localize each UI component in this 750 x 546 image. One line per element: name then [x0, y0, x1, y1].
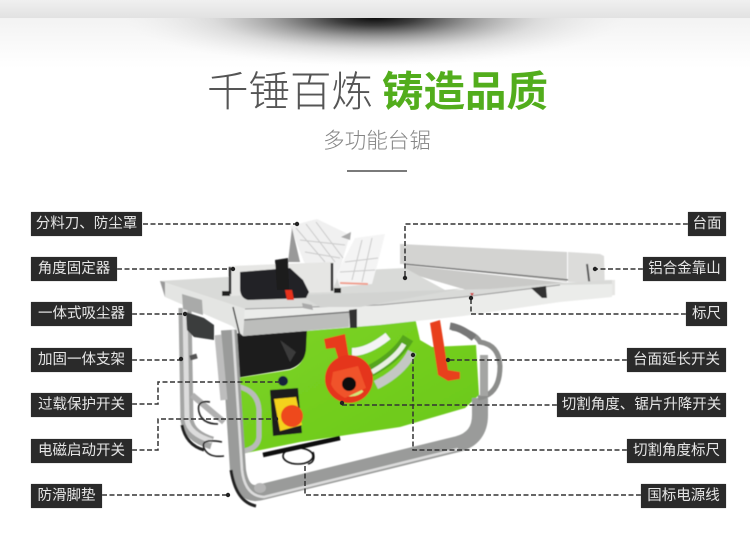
leader lines	[102, 224, 688, 495]
title: green part: 铸造品质	[382, 68, 548, 115]
table saw	[160, 219, 615, 506]
label: magnetic switch: 电磁启动开关	[38, 443, 125, 459]
power cable bundle	[263, 438, 340, 464]
label: cut angle and blade lift	[557, 393, 726, 417]
right handle	[452, 328, 500, 398]
label: table top	[688, 212, 726, 236]
emergency switch	[270, 388, 303, 436]
label: ruler	[686, 302, 727, 326]
red lever	[430, 320, 460, 381]
label: aluminium fence	[643, 257, 726, 281]
green body	[238, 318, 479, 454]
header band with shadow	[0, 0, 750, 60]
label: dust port	[31, 302, 132, 326]
red crank	[324, 334, 349, 358]
label: angle lock	[31, 257, 117, 281]
small overload button	[278, 376, 288, 386]
dust port	[186, 312, 214, 340]
base frame	[218, 330, 480, 506]
label: power cord: 国标电源线	[647, 488, 720, 504]
label: power cord	[641, 484, 726, 508]
label: table top: 台面	[692, 216, 722, 232]
label: magnetic switch	[31, 439, 132, 463]
label: dust port: 一体式吸尘器	[38, 306, 125, 322]
label: angle scale	[627, 439, 726, 463]
label: anti-slip feet: 防滑脚垫	[38, 488, 96, 504]
label: table extension switch	[627, 348, 726, 372]
label: table extension switch: 台面延长开关	[633, 352, 720, 368]
label: angle scale: 切割角度标尺	[633, 443, 720, 459]
label: ruler: 标尺	[692, 306, 721, 322]
back leg and cables	[182, 308, 224, 456]
title divider	[347, 170, 407, 172]
label: cut angle and blade lift: 切割角度、锯片升降开关	[562, 397, 721, 413]
leader dots	[179, 222, 597, 497]
title: thin part: 千锤百炼	[207, 68, 373, 115]
bevel scale and slot	[352, 336, 412, 385]
red hand wheel	[325, 355, 373, 403]
table top	[160, 268, 612, 336]
label: overload switch	[31, 393, 132, 417]
subtitle: 多功能台锯	[323, 128, 431, 153]
label: aluminium fence: 铝合金靠山	[648, 261, 721, 277]
mitre gauge	[222, 258, 341, 310]
label: blade guard: 分料刀、防尘罩	[36, 216, 137, 232]
silver handle left	[240, 387, 259, 451]
label: angle lock: 角度固定器	[38, 261, 110, 277]
blade guard	[288, 219, 385, 288]
label: overload switch: 过载保护开关	[38, 397, 125, 413]
label: blade guard	[31, 212, 142, 236]
label: stand: 加固一体支架	[38, 352, 125, 368]
label: stand	[31, 348, 132, 372]
label: anti-slip feet	[31, 484, 102, 508]
motor	[232, 326, 307, 378]
rip fence	[400, 244, 615, 296]
